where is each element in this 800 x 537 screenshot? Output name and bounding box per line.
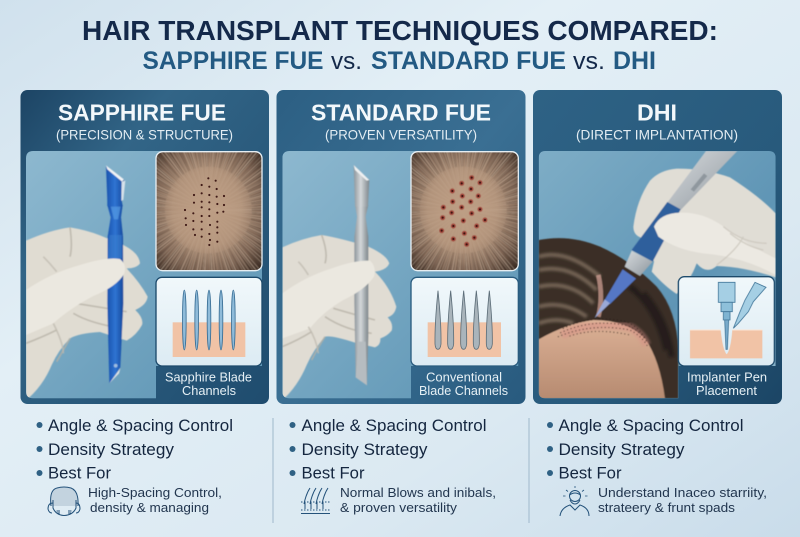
text block: standard fue bullets: & proven versatility (340, 500, 457, 515)
text block: sapphire fue bullets: High-Spacing Control, (88, 485, 222, 500)
text block: standard fue bullets: Density Strategy (302, 440, 428, 459)
icon: consultant person (560, 486, 589, 516)
caption (165, 370, 252, 398)
title: HAIR TRANSPLANT TECHNIQUES COMPARED: (82, 15, 718, 46)
caption: Implanter Pen (687, 370, 767, 384)
text block: sapphire fue bullets: density & managing (90, 500, 209, 515)
panel: dhi (533, 90, 782, 404)
inset: conventional blade channels diagram (411, 277, 518, 366)
panel: sapphire fue (20, 90, 280, 404)
text block: dhi bullets: Density Strategy (558, 440, 685, 459)
inset: scalp with fine sapphire channels (155, 151, 263, 272)
title (82, 15, 718, 75)
caption (419, 370, 508, 398)
text block: sapphire fue bullets: Angle & Spacing Control (48, 416, 233, 435)
panel: sapphire fue: SAPPHIRE FUE (58, 100, 226, 126)
text block: standard fue bullets: Best For (302, 464, 365, 482)
panel: standard fue: STANDARD FUE (311, 100, 491, 126)
caption (687, 370, 767, 398)
text block: standard fue bullets: Normal Blows and inibals, (340, 485, 496, 500)
photo: implanter pen at hairline (539, 151, 776, 399)
text block: dhi bullets: Angle & Spacing Control (558, 416, 744, 435)
inset: implanter pen placement diagram (678, 277, 774, 366)
panel: sapphire fue: (PRECISION & STRUCTURE) (56, 126, 233, 142)
panel: dhi: DHI (637, 100, 677, 126)
text block: sapphire fue bullets: Best For (48, 464, 111, 482)
caption: Placement (696, 383, 757, 398)
icon: head with hair (48, 487, 80, 516)
caption: Blade Channels (419, 383, 508, 398)
inset: scalp with standard channels (410, 151, 519, 272)
panel: standard fue (276, 90, 535, 404)
caption: Conventional (426, 370, 502, 384)
title: DHI (613, 47, 656, 75)
title: vs. (331, 48, 362, 75)
inset: sapphire blade channels diagram (156, 277, 262, 366)
text block: dhi bullets: Best For (558, 464, 622, 482)
title: vs. (573, 48, 605, 75)
divider (528, 418, 530, 523)
title: SAPPHIRE FUE (142, 47, 324, 75)
text block: standard fue bullets (290, 416, 496, 515)
caption: Channels (182, 383, 236, 398)
title: STANDARD FUE (371, 47, 566, 75)
panel: standard fue: (PROVEN VERSATILITY) (325, 126, 477, 142)
text block: standard fue bullets: Angle & Spacing Control (302, 416, 486, 435)
divider (272, 418, 274, 523)
caption: Sapphire Blade (165, 370, 252, 384)
text block: sapphire fue bullets: Density Strategy (48, 440, 174, 459)
panel: dhi: (DIRECT IMPLANTATION) (576, 126, 738, 142)
text block: dhi bullets: strateery & frunt spads (598, 500, 735, 515)
text block: dhi bullets: Understand Inaceo starriity, (598, 485, 767, 500)
text block: sapphire fue bullets (36, 416, 233, 515)
photo: gloved hand holding steel blade (282, 151, 519, 399)
text block: dhi bullets (547, 416, 767, 515)
icon: hair follicles (301, 488, 330, 514)
photo: gloved hand holding sapphire blade (26, 151, 263, 399)
